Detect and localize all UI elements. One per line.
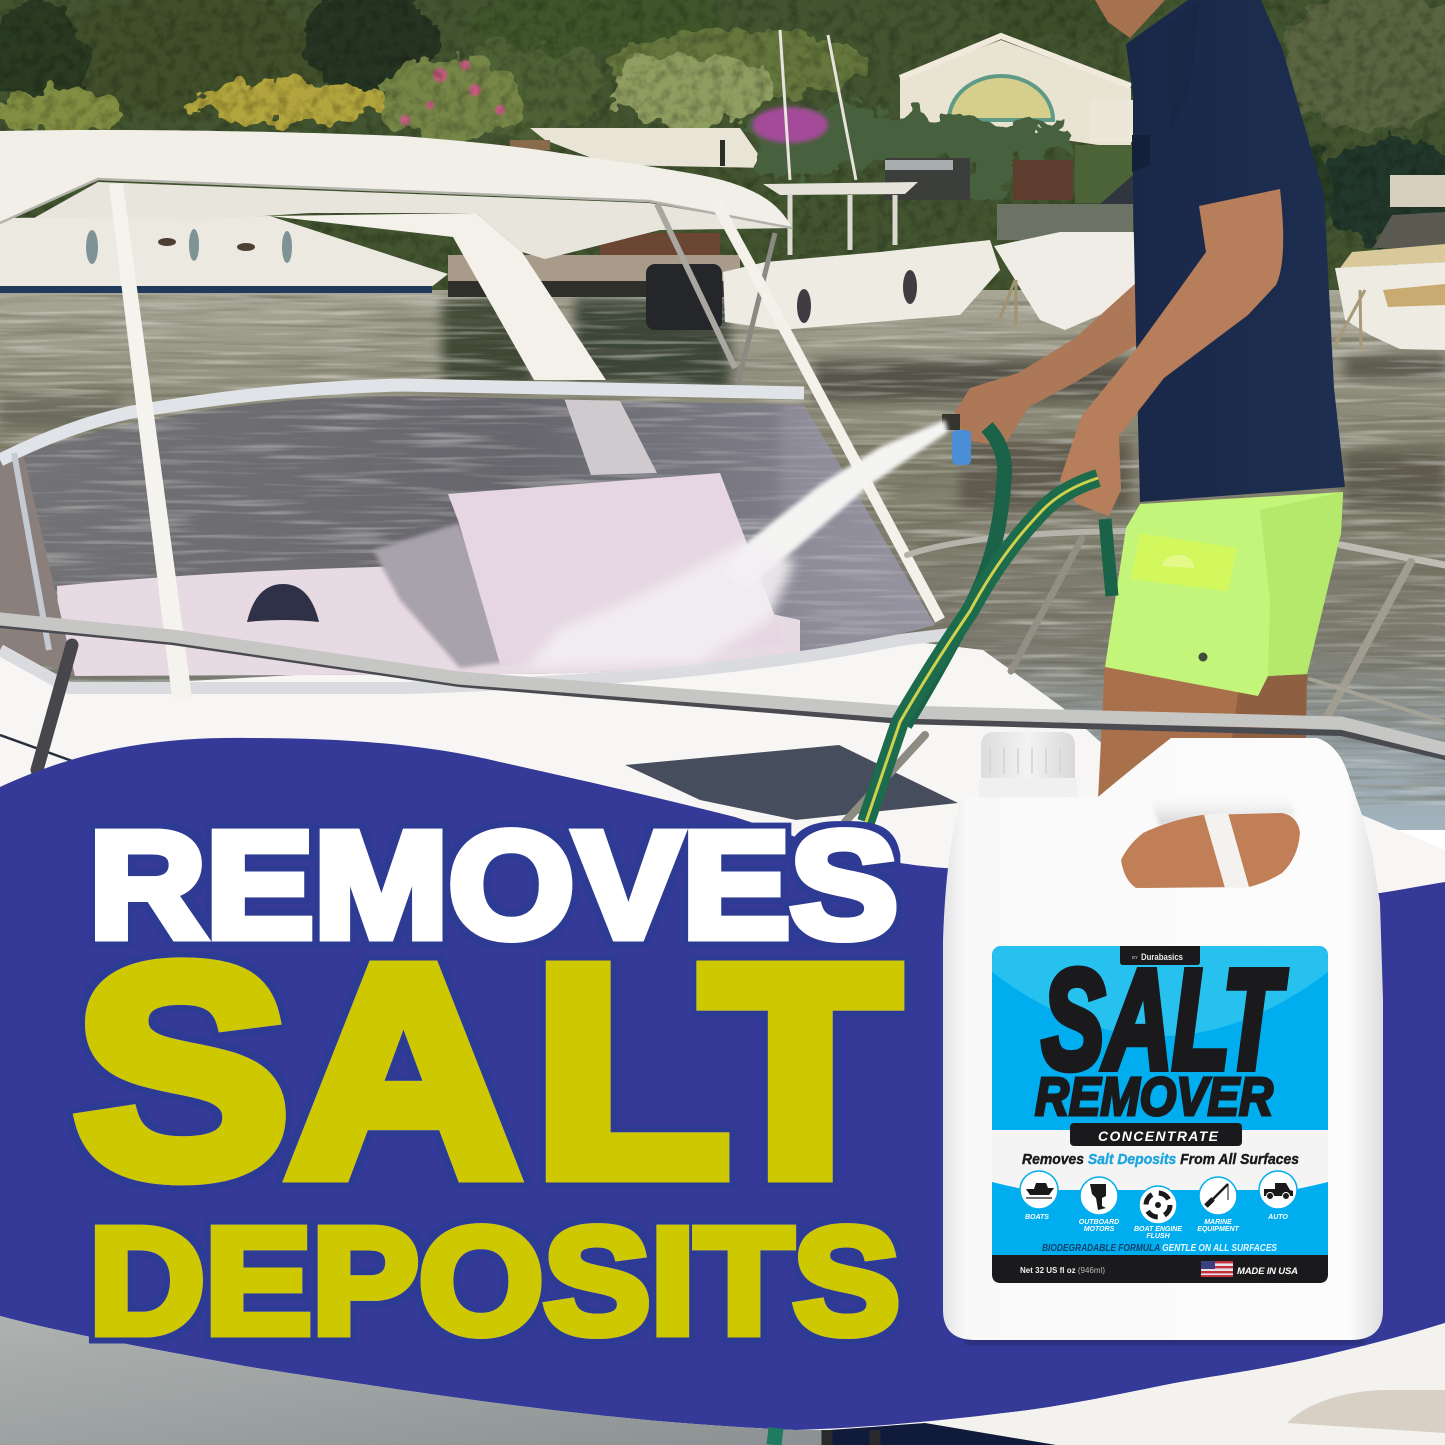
- wave banner: [0, 738, 1445, 1430]
- jug: handle shading: [1150, 790, 1296, 826]
- water: dark reflections: [0, 298, 1445, 510]
- headline: SALT: SALT: [75, 904, 899, 1237]
- label: icon boats: [1020, 1171, 1058, 1209]
- man: near arm with hand: [1060, 189, 1283, 516]
- water spray: [525, 420, 948, 668]
- label: brand tab: BY: [1132, 955, 1138, 960]
- label: usa flag: [1201, 1261, 1233, 1277]
- background: dock: [448, 233, 740, 297]
- label: [992, 940, 1328, 1283]
- boat: hull and deck: [0, 640, 1445, 1445]
- label: net volume: Net 32 US fl oz (946ml): [1020, 1265, 1105, 1275]
- jug: handle opening: [1121, 813, 1300, 888]
- background: house: [745, 36, 1133, 203]
- label: SALT: SALT: [1042, 940, 1287, 1098]
- label: icon captions: [1025, 1214, 1288, 1240]
- lower hull right: [774, 1323, 1445, 1445]
- background boat: cruiser behind man: [994, 175, 1135, 330]
- label: icon captions: BOATS: [1025, 1214, 1049, 1221]
- boat: canopy: [0, 130, 940, 698]
- man: legs: [1098, 660, 1307, 900]
- label: background: [992, 946, 1328, 1283]
- label: icon captions: FLUSH: [1146, 1233, 1171, 1240]
- product jug: [943, 732, 1383, 1340]
- man: far arm with hand: [952, 281, 1138, 446]
- background boat: left cruiser: [0, 216, 448, 293]
- man: lime shorts: [1105, 492, 1343, 696]
- boat: windshield: [0, 385, 950, 688]
- label: concentrate tab: [1070, 1123, 1242, 1146]
- label: brand tab: Durabasics: [1141, 952, 1183, 963]
- label: icon auto: [1259, 1171, 1297, 1209]
- gray lower hull: [0, 1316, 832, 1445]
- label: icon captions: EQUIPMENT: [1197, 1226, 1240, 1233]
- headline: [75, 800, 900, 1365]
- boat: background railing: [907, 531, 1445, 722]
- label: icon marine equipment: [1199, 1177, 1237, 1215]
- boat: main rail: [0, 619, 1445, 822]
- label: REMOVER: REMOVER: [1035, 1067, 1273, 1127]
- garden hose: [866, 427, 1112, 822]
- background: awning: [510, 128, 768, 168]
- label: icon captions: BOAT ENGINE: [1134, 1226, 1182, 1233]
- label: concentrate tab: CONCENTRATE: [1098, 1128, 1219, 1144]
- background boat: right: [1335, 175, 1445, 350]
- jug: cap: [979, 732, 1077, 798]
- boat: deck hatch: [625, 745, 958, 820]
- label: biodegradable line: BIODEGRADABLE FORMULA GENTLE ON ALL SURFACES: [1042, 1243, 1277, 1254]
- label: icon outboard motors: [1080, 1177, 1118, 1215]
- label: brand tab: [1120, 946, 1200, 965]
- man: head: [1095, 0, 1165, 38]
- background boat: center: [646, 30, 1000, 330]
- label: icon captions: MARINE: [1204, 1219, 1232, 1226]
- label: tagline: Removes Salt Deposits From All Surfaces: [1022, 1152, 1299, 1168]
- label: icon captions: MOTORS: [1084, 1226, 1115, 1233]
- water: ripples: [0, 295, 1445, 805]
- water: [0, 290, 1445, 830]
- label: icon captions: AUTO: [1267, 1214, 1288, 1221]
- label: icon engine flush: [1139, 1186, 1177, 1224]
- spray nozzle: [942, 414, 971, 465]
- man: navy shirt: [1126, 0, 1345, 502]
- headline: DEPOSITS: DEPOSITS: [89, 1196, 900, 1365]
- background: foliage and shoreline: [0, 0, 1445, 300]
- label: made in usa: MADE IN USA: [1237, 1266, 1298, 1277]
- jug shadow on banner: [965, 1336, 1365, 1345]
- label: icon captions: OUTBOARD: [1079, 1219, 1119, 1226]
- jug: body: [943, 738, 1383, 1340]
- headline: REMOVES: REMOVES: [89, 800, 898, 969]
